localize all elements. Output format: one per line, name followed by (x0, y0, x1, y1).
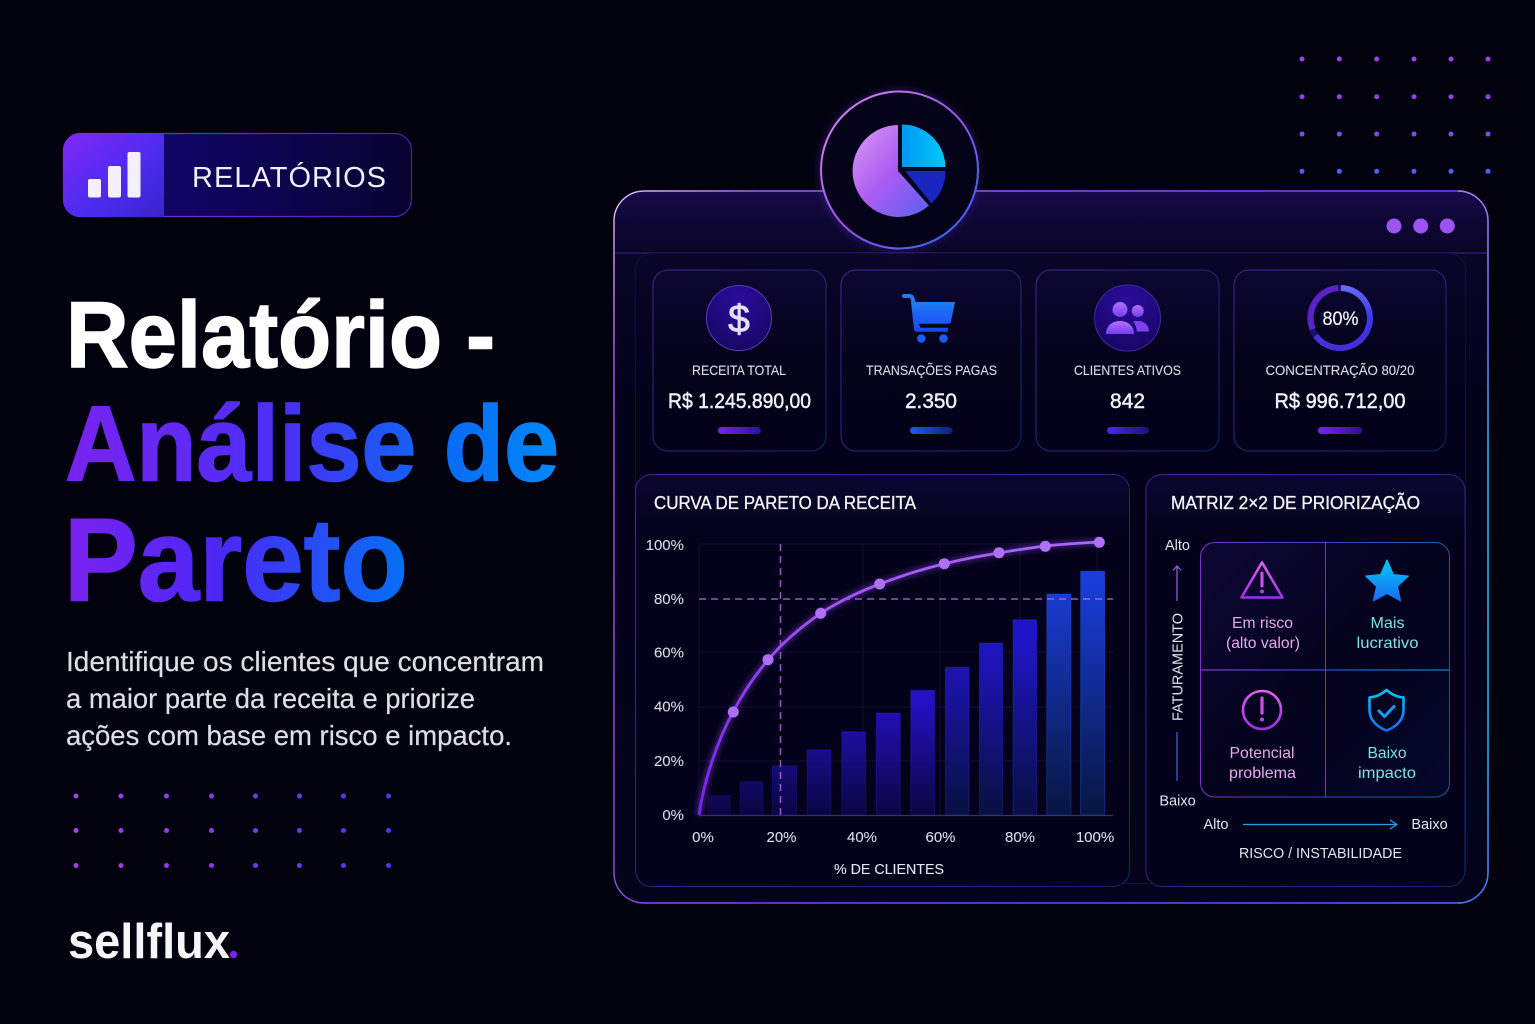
title: Relatório - (66, 282, 495, 387)
y axis: faturamento: FATURAMENTO (1170, 613, 1186, 721)
card: transações pagas: TRANSAÇÕES PAGAS (866, 362, 997, 378)
x axis labels: 0% (692, 829, 714, 846)
x axis labels: 60% (925, 829, 956, 846)
quadrant: baixo impacto (1358, 690, 1416, 782)
x axis: risco / instabilidade: Baixo (1411, 817, 1448, 833)
subtitle text block: a maior parte da receita e priorize (66, 683, 475, 714)
card: clientes ativos: 842 (1110, 390, 1145, 413)
y axis labels: 20% (654, 753, 684, 770)
quadrant: em risco: Em risco (1232, 615, 1293, 632)
subtitle text block (66, 646, 544, 751)
panel: matriz 2x2 (1146, 474, 1465, 886)
card: receita total (653, 270, 826, 451)
icon: cart (904, 296, 955, 343)
card: transações pagas (841, 270, 1021, 451)
icon: dollar (706, 286, 772, 350)
icon: bar chart on gradient tile (63, 134, 164, 217)
quadrant: baixo impacto: impacto (1358, 765, 1416, 782)
y axis labels (646, 537, 684, 824)
icon: dollar: $ (728, 298, 750, 341)
y axis labels: 40% (654, 698, 684, 716)
icon: star (1366, 560, 1408, 601)
icon: shield check (1370, 690, 1404, 730)
subtitle text block: ações com base em risco e impacto. (66, 720, 512, 751)
icon: alert circle (1243, 691, 1281, 729)
title: Pareto (64, 494, 408, 626)
quadrant: potencial problema: problema (1229, 765, 1296, 782)
window control dots (1386, 218, 1455, 234)
title: Análise de (65, 384, 559, 504)
card: clientes ativos: CLIENTES ATIVOS (1074, 362, 1181, 378)
matrix grid (1200, 542, 1450, 797)
card: receita total: RECEITA TOTAL (692, 362, 786, 378)
quadrant: mais lucrativo: Mais (1370, 615, 1404, 632)
x axis: risco / instabilidade: Alto (1204, 817, 1228, 833)
quadrant: baixo impacto: Baixo (1368, 745, 1407, 762)
y axis labels: 100% (646, 537, 684, 554)
icon: users (1094, 285, 1160, 351)
y axis: faturamento (1159, 538, 1196, 810)
heading: matriz: MATRIZ 2×2 DE PRIORIZAÇÃO (1171, 492, 1420, 513)
x axis: risco / instabilidade (1204, 817, 1448, 862)
icon: donut 80%: 80% (1322, 308, 1358, 330)
x axis labels: 40% (847, 829, 877, 846)
logo: sellflux: sellflux (68, 915, 230, 969)
card: concentração 80/20: CONCENTRAÇÃO 80/20 (1266, 362, 1415, 378)
quadrant: em risco: (alto valor) (1226, 635, 1300, 652)
quadrant: mais lucrativo (1356, 560, 1419, 652)
x axis labels: 20% (766, 829, 797, 846)
card: concentração 80/20 (1234, 270, 1446, 451)
card: clientes ativos (1036, 270, 1219, 451)
y axis: faturamento: Baixo (1159, 794, 1196, 810)
icon: donut 80% (1310, 288, 1370, 348)
x axis: risco / instabilidade: RISCO / INSTABILIDADE (1239, 846, 1402, 862)
quadrant: potencial problema (1229, 691, 1296, 782)
badge: relatórios (63, 134, 412, 217)
subtitle text block: Identifique os clientes que concentram (66, 646, 544, 677)
bar chart (708, 571, 1105, 815)
quadrant: mais lucrativo: lucrativo (1356, 635, 1419, 652)
y axis labels: 60% (654, 644, 684, 662)
x axis title: % DE CLIENTES (834, 861, 944, 878)
card: transações pagas: 2.350 (905, 390, 957, 413)
icon: pie chart medallion (820, 91, 978, 249)
icon: warning triangle (1242, 562, 1282, 598)
y axis: faturamento: Alto (1165, 538, 1190, 554)
x axis labels: 100% (1076, 829, 1114, 846)
badge label: RELATÓRIOS (192, 161, 386, 194)
title (64, 282, 559, 626)
80/20 reference lines (699, 544, 1113, 815)
quadrant: em risco (1226, 562, 1300, 652)
heading: curva de pareto: CURVA DE PARETO DA RECEITA (654, 493, 916, 513)
y axis labels: 0% (662, 807, 684, 824)
panel: dashboard window (614, 191, 1488, 903)
card: receita total: R$ 1.245.890,00 (668, 390, 811, 413)
y axis labels: 80% (654, 591, 684, 608)
x axis labels: 80% (1005, 829, 1035, 846)
quadrant: potencial problema: Potencial (1230, 745, 1294, 762)
x axis labels (692, 829, 1114, 846)
panel: curva de pareto (636, 474, 1130, 886)
pareto curve (699, 537, 1105, 815)
card: concentração 80/20: R$ 996.712,00 (1274, 390, 1406, 413)
